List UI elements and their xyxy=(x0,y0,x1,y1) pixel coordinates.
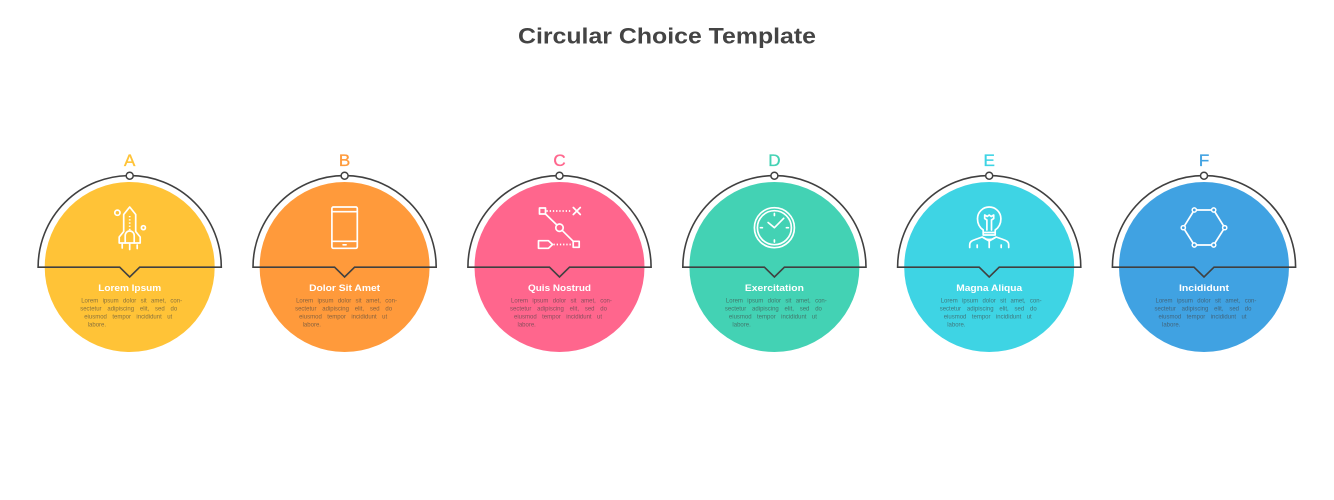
arc callout C xyxy=(468,176,651,277)
description E: sectetur adipiscing elit, sed do xyxy=(940,307,1037,313)
panel: option B xyxy=(253,151,436,352)
marker E xyxy=(986,172,993,179)
description E xyxy=(940,299,1042,328)
heading A: Lorem Ipsum xyxy=(98,283,161,294)
heading B: Dolor Sit Amet xyxy=(309,283,381,294)
icon: vector path xyxy=(538,208,580,248)
icon: person with light bulb xyxy=(970,207,1009,248)
description B: sectetur adipiscing elit, sed do xyxy=(295,307,393,313)
panel: option A xyxy=(38,151,221,352)
letter B: B xyxy=(339,151,350,170)
arc callout B xyxy=(253,176,436,277)
heading D: Exercitation xyxy=(745,283,804,294)
panel: option E xyxy=(898,151,1081,352)
panel: option D xyxy=(683,151,866,352)
letter F: F xyxy=(1199,151,1209,170)
description E: eiusmod tempor incididunt ut xyxy=(944,315,1032,321)
description B: eiusmod tempor incididunt ut xyxy=(299,315,387,321)
arc callout A xyxy=(38,176,221,277)
description A: Lorem ipsum dolor sit amet, con- xyxy=(81,299,182,305)
heading C: Quis Nostrud xyxy=(528,283,591,294)
circle B xyxy=(260,182,430,352)
heading E: Magna Aliqua xyxy=(956,283,1023,294)
description C: sectetur adipiscing elit, sed do xyxy=(510,307,608,313)
icon: tablet phone xyxy=(332,207,357,248)
description D: eiusmod tempor incididunt ut xyxy=(729,315,817,321)
icon: rocket xyxy=(115,207,145,250)
description C: Lorem ipsum dolor sit amet, con- xyxy=(511,299,612,305)
description A: eiusmod tempor incididunt ut xyxy=(84,315,173,321)
description F: labore. xyxy=(1162,322,1181,328)
description A: sectetur adipiscing elit, sed do xyxy=(80,307,178,313)
description F: sectetur adipiscing elit, sed do xyxy=(1154,307,1252,313)
marker C xyxy=(556,172,563,179)
description F xyxy=(1154,299,1256,328)
heading F: Incididunt xyxy=(1179,283,1230,294)
marker D xyxy=(771,172,778,179)
description D: sectetur adipiscing elit, sed do xyxy=(725,307,823,313)
marker A xyxy=(126,172,133,179)
arc callout E xyxy=(898,176,1081,277)
description D xyxy=(725,299,827,328)
description C xyxy=(510,299,612,328)
arc callout F xyxy=(1112,176,1296,277)
description A xyxy=(80,299,182,328)
arc callout D xyxy=(683,176,866,277)
letter D: D xyxy=(768,151,781,170)
description F: Lorem ipsum dolor sit amet, con- xyxy=(1156,299,1256,305)
marker B xyxy=(341,172,348,179)
description B: Lorem ipsum dolor sit amet, con- xyxy=(296,299,397,305)
circle C xyxy=(474,182,644,352)
description B xyxy=(295,299,397,328)
description B: labore. xyxy=(303,322,321,328)
description C: eiusmod tempor incididunt ut xyxy=(514,315,602,321)
description D: Lorem ipsum dolor sit amet, con- xyxy=(726,299,827,305)
circle D xyxy=(689,182,859,352)
description C: labore. xyxy=(518,322,536,328)
panel: option F xyxy=(1112,151,1296,352)
description F: eiusmod tempor incididunt ut xyxy=(1158,315,1247,321)
panel: option C xyxy=(468,151,651,352)
letter A: A xyxy=(124,151,136,170)
title: Circular Choice Template xyxy=(518,24,816,48)
marker F xyxy=(1200,172,1208,179)
icon: hexagon xyxy=(1181,208,1227,247)
circle E xyxy=(904,182,1074,352)
description E: labore. xyxy=(947,322,966,328)
description A: labore. xyxy=(88,322,106,328)
letter C: C xyxy=(553,151,566,170)
icon: clock xyxy=(754,208,794,248)
circle A xyxy=(45,182,215,352)
description D: labore. xyxy=(732,322,751,328)
description E: Lorem ipsum dolor sit amet, con- xyxy=(941,299,1042,305)
letter E: E xyxy=(984,151,995,170)
circle F xyxy=(1119,182,1289,352)
